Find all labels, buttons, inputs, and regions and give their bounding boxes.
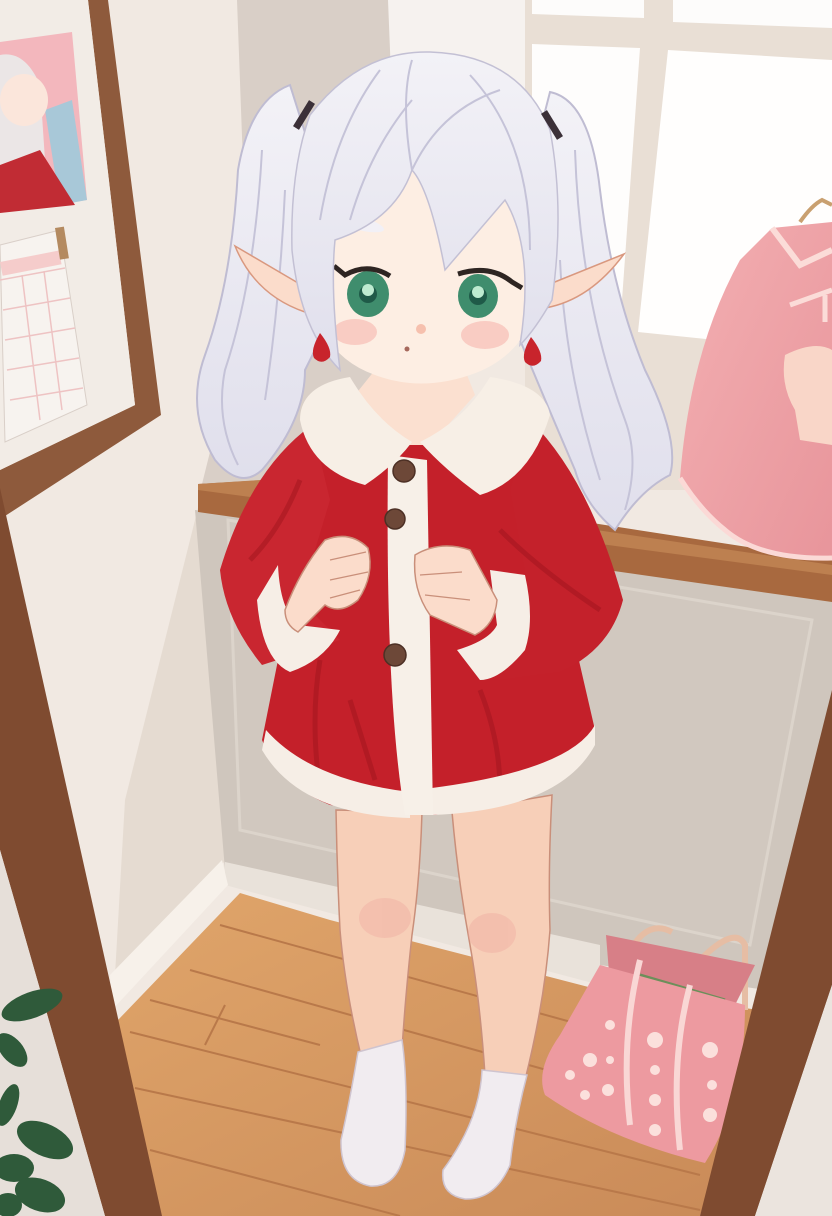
wall outside mirror, left xyxy=(0,850,105,1216)
pink garment on hanger xyxy=(680,200,832,558)
tote bag xyxy=(542,928,755,1163)
fringe strands xyxy=(320,60,530,250)
earrings xyxy=(313,333,541,366)
picture frame xyxy=(0,0,161,516)
neck xyxy=(355,370,475,445)
nose and mouth xyxy=(404,324,426,352)
twin tail strands xyxy=(222,150,632,510)
back wall upper xyxy=(198,0,392,500)
wooden shelf xyxy=(198,478,832,602)
knee shading xyxy=(359,898,516,953)
mirror frame right xyxy=(700,690,832,1216)
window xyxy=(525,0,832,490)
face xyxy=(305,165,545,384)
eyebrows xyxy=(324,207,489,237)
hands xyxy=(285,536,497,635)
panelled lower wall xyxy=(195,510,832,1000)
curtain xyxy=(388,0,532,300)
cheeks xyxy=(333,319,509,349)
wall skirting xyxy=(110,860,228,1010)
calendar sheet xyxy=(0,227,87,442)
coat hem fur xyxy=(262,725,595,818)
fur collar xyxy=(300,377,550,495)
left eye xyxy=(334,266,390,317)
left twin tail xyxy=(197,85,340,478)
fringe hair xyxy=(292,52,558,370)
sleeve cuffs xyxy=(257,565,530,680)
right twin tail xyxy=(520,92,672,530)
left sleeve xyxy=(220,425,340,665)
legs xyxy=(336,795,552,1080)
red coat body xyxy=(262,430,595,815)
poster xyxy=(0,32,87,213)
right eye xyxy=(458,270,522,318)
plant xyxy=(0,982,79,1216)
socks xyxy=(341,1040,527,1199)
ears xyxy=(235,246,624,312)
coat buttons xyxy=(384,460,415,666)
right sleeve xyxy=(470,420,623,680)
hair ties xyxy=(296,102,560,138)
coat placket xyxy=(388,455,433,815)
coat folds xyxy=(250,480,600,790)
wooden floor xyxy=(118,893,760,1216)
wall outside mirror, right xyxy=(755,985,832,1216)
mirror frame left xyxy=(0,488,162,1216)
